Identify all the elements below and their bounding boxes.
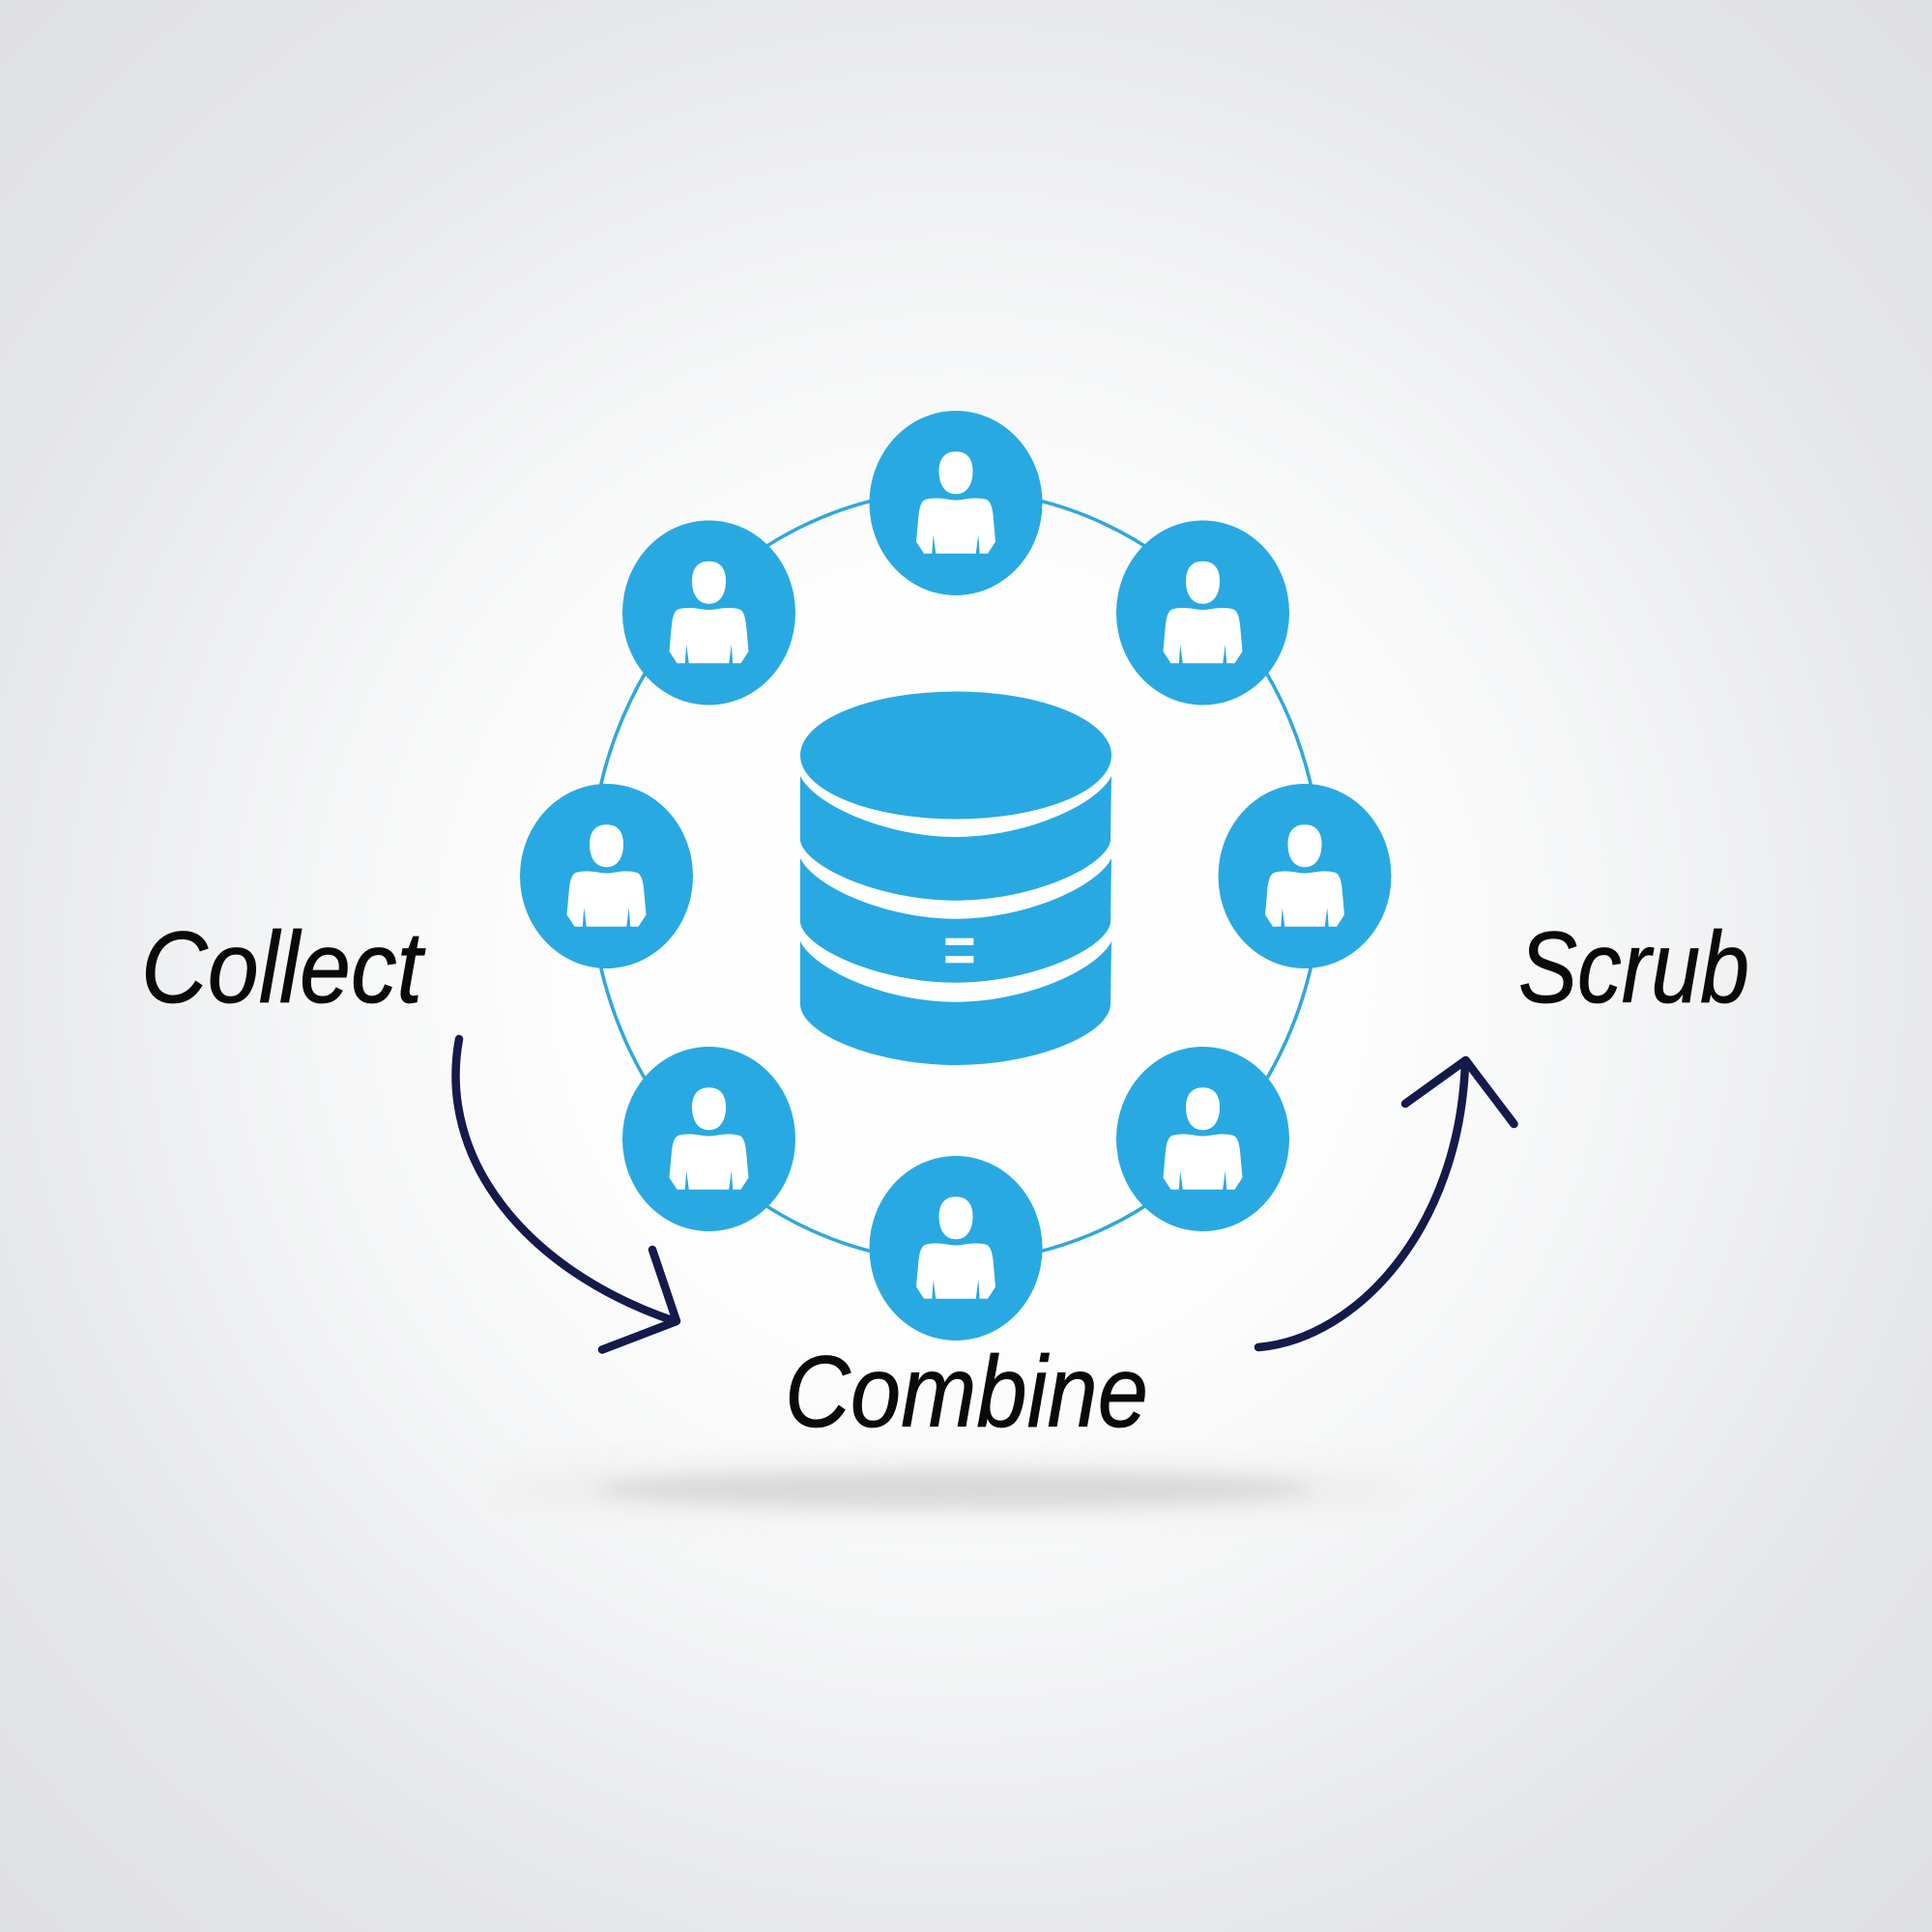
user node: upper right (1116, 520, 1289, 706)
label: Combine: Combine (785, 1336, 1148, 1449)
user node: lower left (622, 1047, 795, 1231)
label: Collect: Collect (141, 911, 425, 1024)
user node: left (520, 784, 693, 968)
ground shadow (491, 1468, 1419, 1511)
user node: lower right (1116, 1047, 1289, 1231)
icon: database (800, 692, 1111, 1065)
user node: right (1218, 784, 1392, 968)
label: Scrub: Scrub (1518, 911, 1749, 1024)
user node: bottom (870, 1156, 1042, 1341)
user node: top (870, 411, 1042, 595)
arrow: combine to scrub (1258, 1060, 1514, 1347)
arrow: collect to combine (456, 1039, 677, 1349)
ring connecting users (591, 491, 1321, 1262)
user node: upper left (622, 520, 795, 706)
